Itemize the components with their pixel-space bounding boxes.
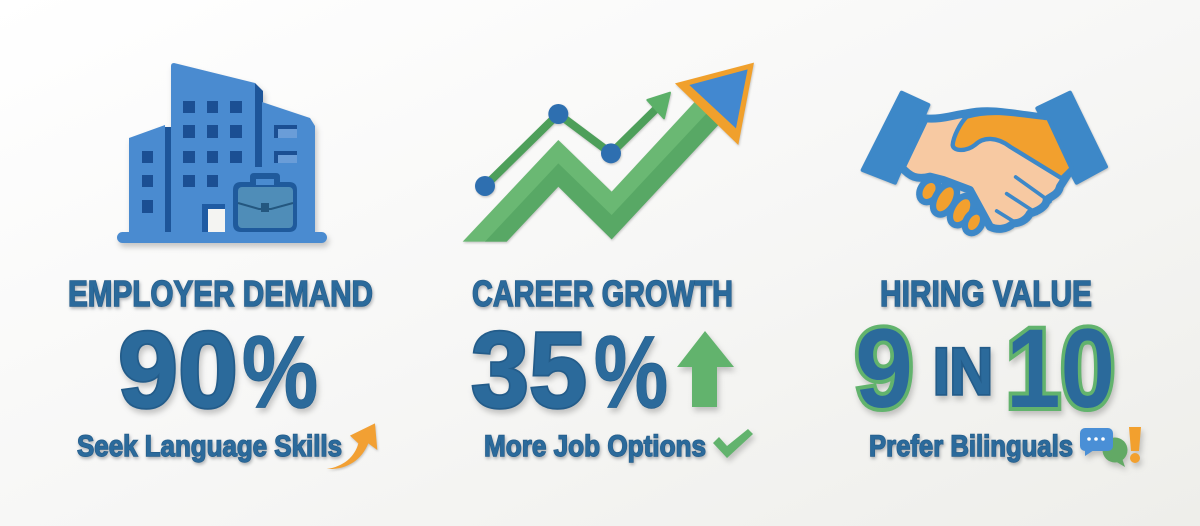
stat: 35%: %: [594, 315, 668, 429]
caption: prefer bilinguals: Prefer Bilinguals: [869, 430, 1073, 463]
caption: seek language skills: Seek Language Skills: [77, 430, 342, 463]
arrowhead: [675, 63, 754, 145]
heading: career growth: CAREER GROWTH: [472, 273, 733, 314]
data points: [475, 176, 495, 196]
fingers: [920, 181, 982, 232]
stat: 90%: 90: [118, 309, 238, 430]
stat: 9 in 10: 9: [855, 306, 913, 431]
heading: employer demand: EMPLOYER DEMAND: [68, 273, 373, 314]
left cuff: [863, 93, 928, 183]
stat: 35%: 35: [471, 309, 587, 430]
right cuff: [1037, 93, 1106, 183]
icon: green check mark: [713, 429, 753, 458]
icon: speech bubbles and exclamation: [1080, 427, 1141, 467]
icon: green up arrow: [677, 331, 734, 407]
stat: 35%: [471, 309, 668, 430]
big zigzag arrow: [463, 102, 718, 242]
stat: 9 in 10: 10: [1006, 306, 1115, 431]
orange hand: [953, 113, 1072, 178]
clasped hands: [902, 111, 1072, 229]
stat: 90%: [118, 309, 318, 430]
thin arrow head: [647, 93, 670, 118]
panel: career growth: [463, 63, 754, 463]
stat: 90%: %: [242, 315, 318, 429]
icon: growth chart arrow: [463, 63, 754, 242]
stat: 9 in 10: IN: [933, 334, 993, 408]
thin line arrow: [485, 107, 658, 186]
caption: more job options: More Job Options: [484, 430, 706, 463]
icon: office building with briefcase: [117, 63, 327, 243]
heading: hiring value: HIRING VALUE: [880, 273, 1092, 314]
icon: handshake: [863, 93, 1106, 232]
stat: 9 in 10: [855, 306, 1115, 431]
icon: orange rising arrow: [327, 423, 377, 469]
panel: hiring value: [855, 93, 1141, 467]
panel: employer demand: [68, 63, 377, 469]
